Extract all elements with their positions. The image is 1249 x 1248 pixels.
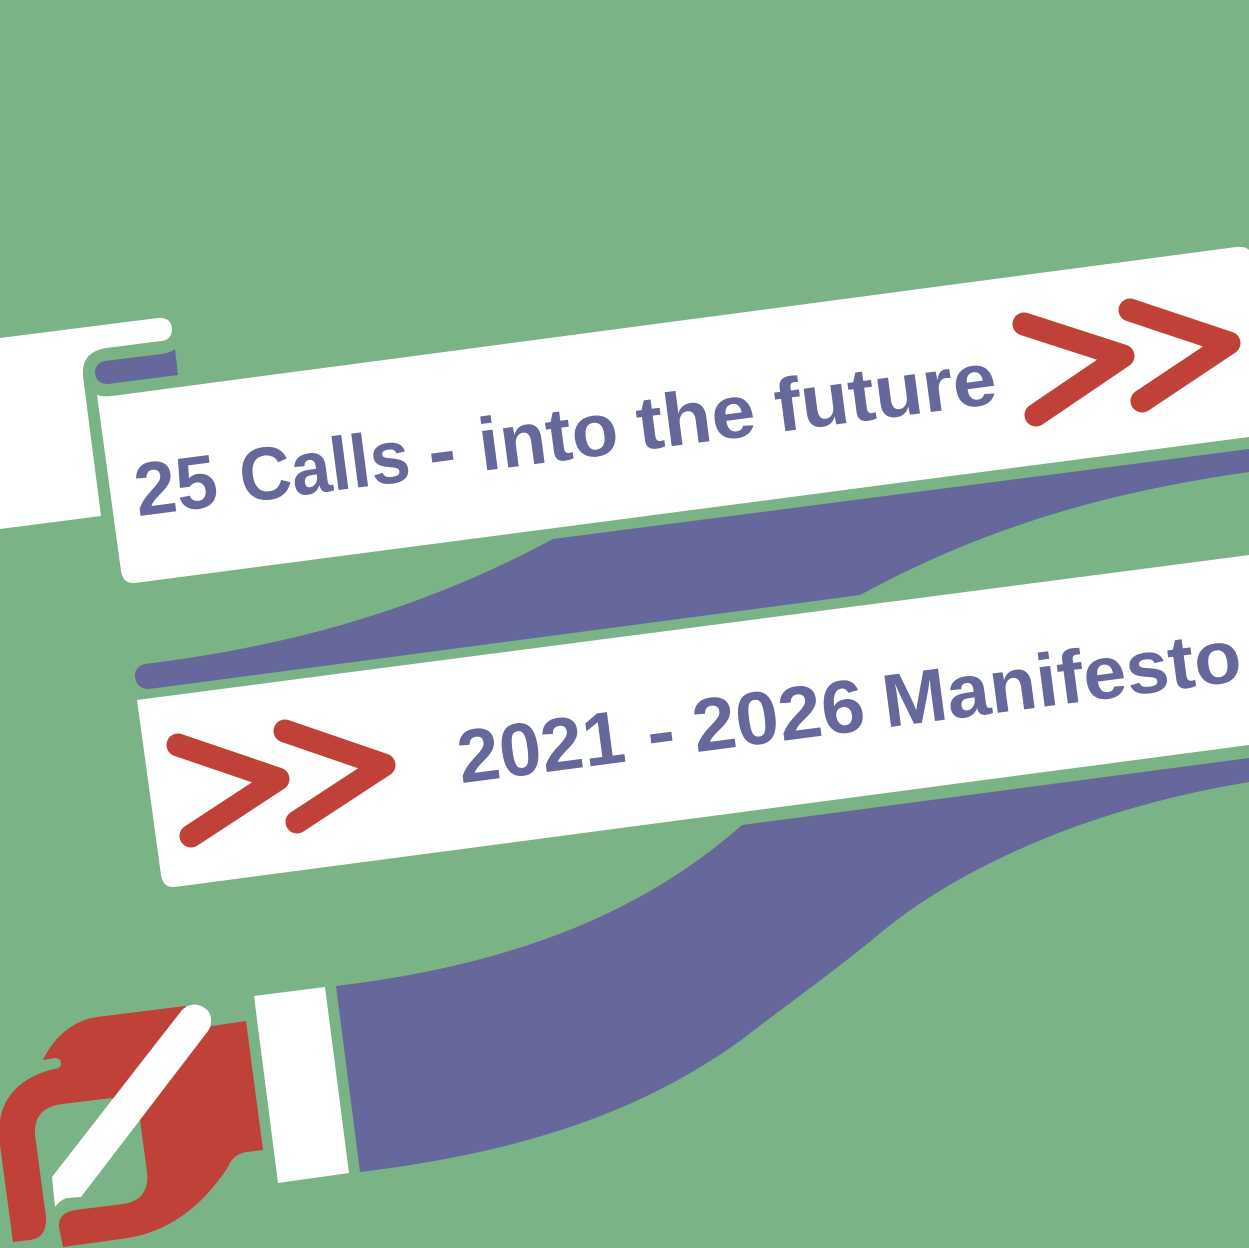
- heading: 25 Calls - into the future (top banner text): into: [473, 385, 623, 487]
- ribbon fold: small purple tab: [95, 349, 178, 384]
- heading: 2021 - 2026 Manifesto (lower banner text): [452, 613, 1246, 799]
- heading: 2021 - 2026 Manifesto (lower banner text): Manifesto: [877, 613, 1246, 743]
- heading: 2021 - 2026 Manifesto (lower banner text): 2021: [452, 694, 630, 799]
- banner shape: [137, 555, 1249, 887]
- panel: top banner: [97, 247, 1249, 583]
- icon: hand holding pen: [0, 1005, 263, 1247]
- pen: [52, 1005, 211, 1207]
- heading: 2021 - 2026 Manifesto (lower banner text): 2026: [687, 662, 870, 768]
- icon: double chevron arrow, bottom: [178, 731, 384, 836]
- heading: 25 Calls - into the future (top banner text): the: [631, 367, 760, 466]
- banner shape: [97, 247, 1249, 583]
- heading: 2021 - 2026 Manifesto (lower banner text): -: [641, 688, 680, 774]
- heading: 25 Calls - into the future (top banner text): Calls: [234, 413, 415, 518]
- ribbon fold: lower purple band: [336, 758, 1249, 1172]
- icon: double chevron arrow, top: [1024, 310, 1229, 415]
- white ribbon end band: [254, 987, 349, 1183]
- heading: 25 Calls - into the future (top banner text): future: [769, 336, 1001, 448]
- hand: [0, 1006, 263, 1247]
- ribbon fold: middle purple band: [135, 449, 1249, 689]
- heading: 25 Calls - into the future (top banner text): -: [422, 407, 461, 494]
- heading: 25 Calls - into the future (top banner text): [129, 336, 1001, 532]
- heading: 25 Calls - into the future (top banner text): 25: [129, 438, 222, 532]
- panel: lower banner: [137, 555, 1249, 887]
- ribbon tail: top left white band: [0, 318, 172, 529]
